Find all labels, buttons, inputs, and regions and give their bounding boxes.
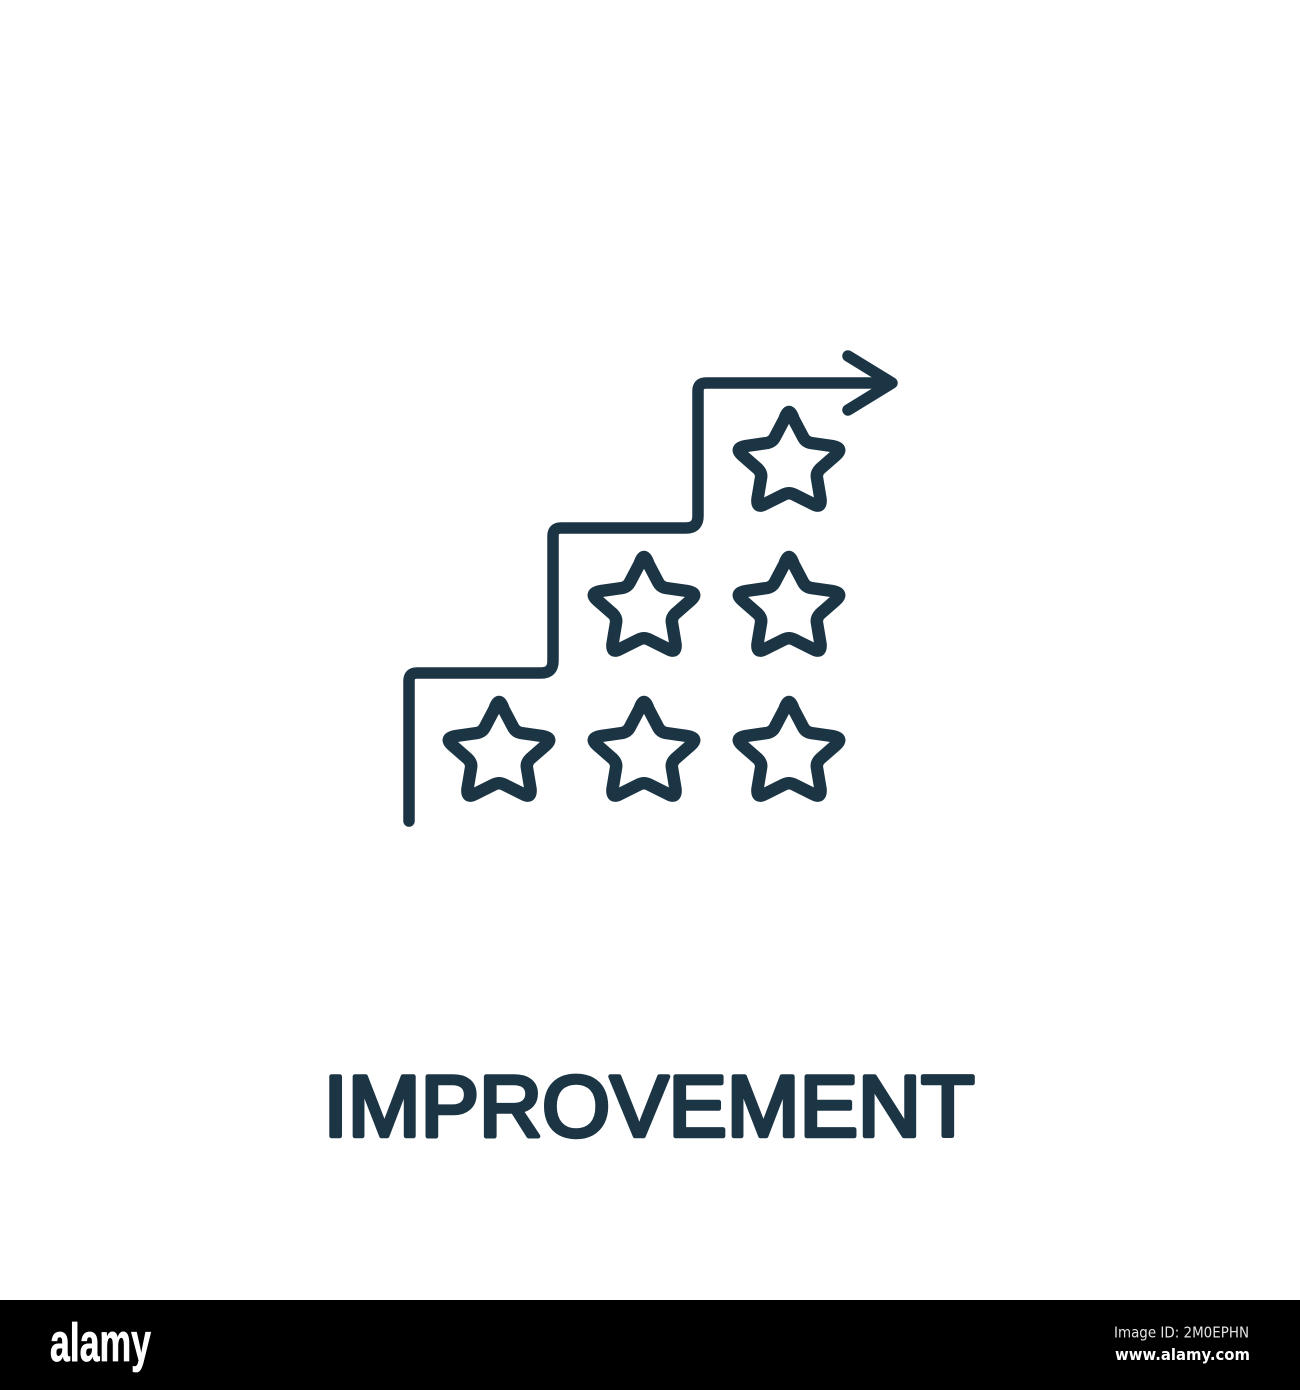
icon: stair-step arrow line — [409, 383, 888, 821]
icon: arrow head — [848, 356, 892, 410]
image id: Image ID: 2M0EPHN — [1114, 1324, 1249, 1342]
website url: www.alamy.com — [1115, 1345, 1250, 1364]
icon: star row 1 — [739, 412, 839, 506]
brand logo text: alamy — [50, 1313, 151, 1373]
title: IMPROVEMENT — [324, 1059, 974, 1155]
icon: improvement staircase with stars — [409, 356, 892, 821]
icon: star row 3 group — [449, 702, 839, 796]
watermark footer bar — [0, 1300, 1300, 1390]
icon: star row 2 group — [594, 557, 839, 651]
